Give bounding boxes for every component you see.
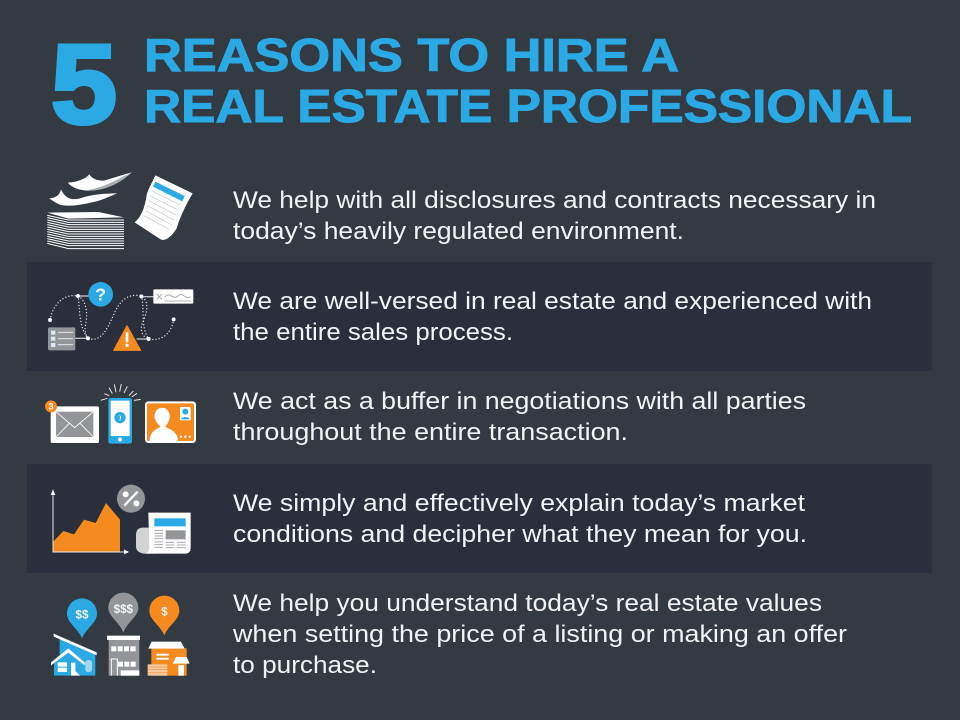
grey building xyxy=(109,638,139,676)
reason 5 text: We help you understand today’s real estate values xyxy=(233,590,822,617)
reason 1 text: We help with all disclosures and contracts necessary in xyxy=(233,187,876,214)
reason 5 text: to purchase. xyxy=(233,652,377,679)
reason 3 text xyxy=(233,388,806,446)
envelope xyxy=(51,406,99,443)
grey pin xyxy=(108,593,138,632)
phone xyxy=(108,398,132,444)
warning triangle xyxy=(114,326,141,350)
reason 5 text: when setting the price of a listing or making an offer xyxy=(232,621,847,648)
icon: process path: ? xyxy=(95,285,106,305)
orange pin xyxy=(149,596,179,635)
heading line 2: REAL ESTATE PROFESSIONAL xyxy=(144,80,912,132)
percent badge xyxy=(117,485,145,513)
icon: priced houses: $$ xyxy=(76,608,89,621)
chart card xyxy=(153,289,193,304)
icon: papers and contract xyxy=(47,172,193,249)
reason 1 text xyxy=(233,187,876,245)
reason 2 text: We are well-versed in real estate and experienced with xyxy=(233,288,872,315)
reason 5 text xyxy=(232,590,847,679)
icon: mail, phone, video call: 3 xyxy=(48,402,54,412)
blue pin xyxy=(67,598,97,638)
panel: row 4 band xyxy=(27,464,932,573)
reason 2 text xyxy=(233,288,872,346)
reason 3 text: We act as a buffer in negotiations with all parties xyxy=(233,388,806,415)
reason 4 text: conditions and decipher what they mean for you. xyxy=(233,521,807,548)
checklist xyxy=(48,327,75,350)
panel: row 2 band xyxy=(27,262,932,371)
reason 1 text: today’s heavily regulated environment. xyxy=(233,218,684,245)
icon: priced houses: $$$ xyxy=(114,603,134,616)
icon: priced houses xyxy=(51,593,190,676)
big number 5: 5 xyxy=(51,22,117,147)
newspaper xyxy=(136,528,155,554)
icon: process path xyxy=(48,282,193,350)
icon: market chart and newspaper xyxy=(51,485,191,554)
contract sheet xyxy=(135,175,193,240)
notification badge xyxy=(45,400,57,412)
blue house xyxy=(54,638,95,676)
heading line 1: REASONS TO HIRE A xyxy=(144,29,679,81)
reason 4 text xyxy=(233,490,807,548)
reason 3 text: throughout the entire transaction. xyxy=(233,419,628,446)
signal rays xyxy=(101,384,141,400)
title xyxy=(51,22,912,147)
video card xyxy=(145,401,196,443)
icon: mail, phone, video call xyxy=(45,384,196,444)
question badge xyxy=(88,282,113,307)
reason 4 text: We simply and effectively explain today’s market xyxy=(233,490,805,517)
orange house xyxy=(151,648,187,676)
icon: priced houses: $ xyxy=(161,606,168,619)
area chart xyxy=(53,503,120,552)
reason 2 text: the entire sales process. xyxy=(233,319,513,346)
